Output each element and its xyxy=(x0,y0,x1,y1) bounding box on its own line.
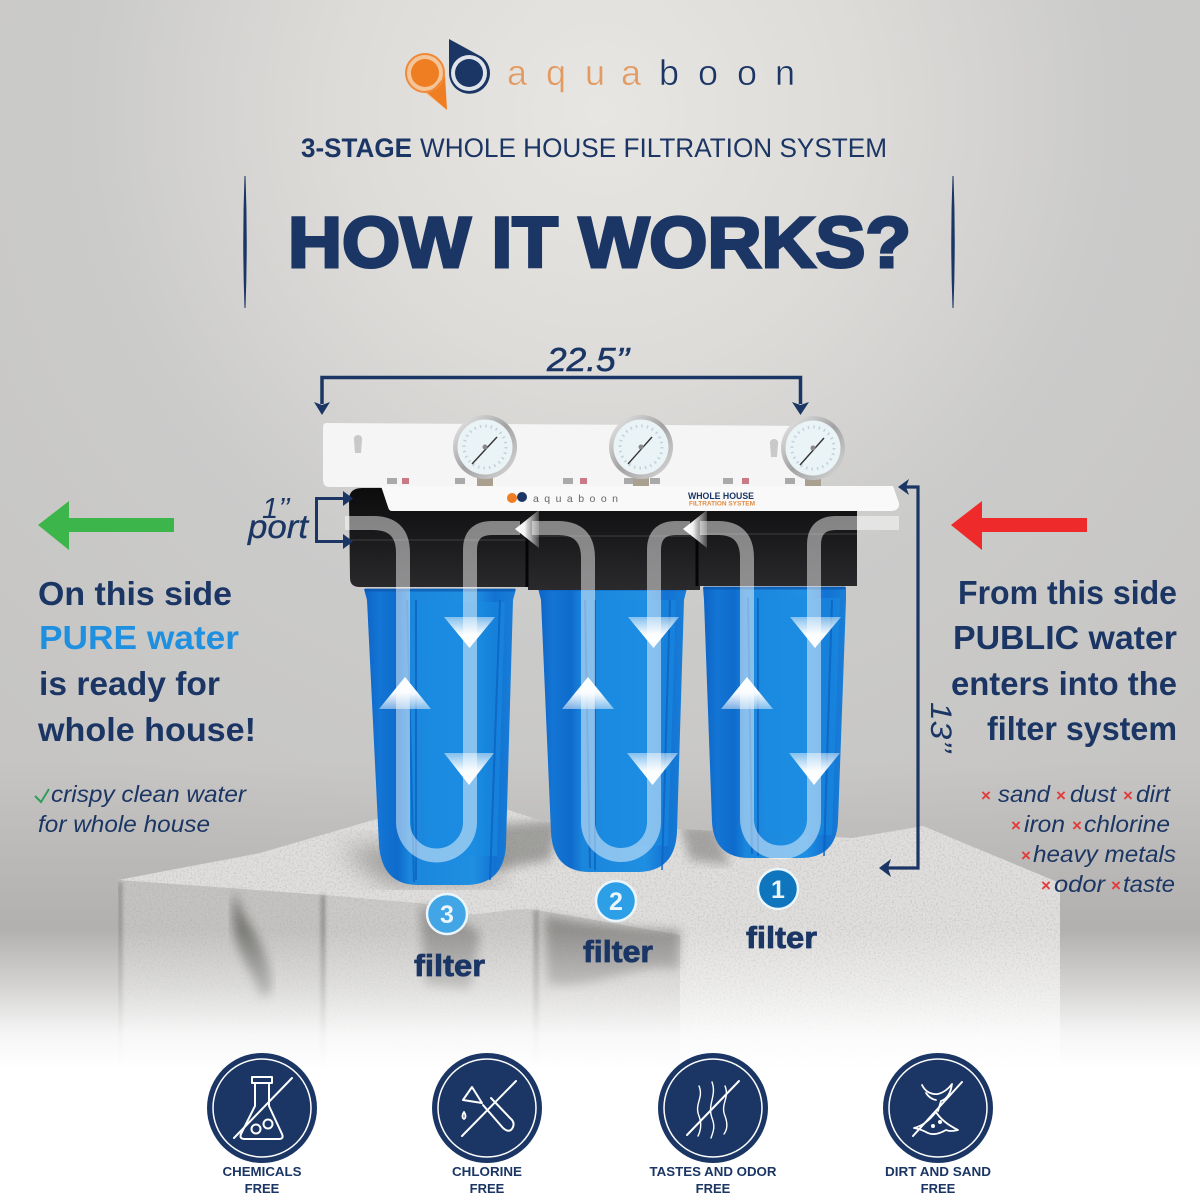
icon: flask xyxy=(207,1053,317,1163)
left text: pure water: PURE water xyxy=(39,619,239,656)
right contaminants list: × xyxy=(1123,786,1133,805)
dimension: port 1 in: 1’’ xyxy=(262,493,291,525)
dimension: height 13 in: 13’’ xyxy=(924,702,957,754)
left text: pure water: is ready for xyxy=(39,665,220,702)
badge: tastes and odor free: TASTES AND ODOR xyxy=(650,1164,777,1179)
filter label 1 xyxy=(746,869,817,955)
right contaminants list: dirt xyxy=(1136,781,1172,807)
black filter heads xyxy=(349,488,857,590)
filter label 1: 1 xyxy=(771,876,785,904)
water flow path stage 3 xyxy=(345,523,520,856)
plate label: FILTRATION SYSTEM xyxy=(689,500,755,508)
heading: HOW IT WORKS? xyxy=(288,204,911,283)
plate label: WHOLE HOUSE xyxy=(688,491,754,501)
green outlet arrow xyxy=(38,501,174,550)
left benefits list xyxy=(35,781,247,837)
dimension: port 1 in xyxy=(247,491,353,549)
badge: tastes and odor free xyxy=(650,1053,777,1196)
red inlet arrow xyxy=(951,501,1087,550)
left text: pure water: On this side xyxy=(38,575,232,612)
right contaminants list: × xyxy=(981,786,991,805)
left benefits list: for whole house xyxy=(38,811,210,837)
right contaminants list: sand xyxy=(998,781,1051,807)
right contaminants list: × xyxy=(1072,816,1082,835)
badge: dirt and sand free: DIRT AND SAND xyxy=(885,1164,991,1179)
right contaminants list: odor xyxy=(1054,871,1106,897)
concrete block xyxy=(118,810,1060,1027)
right text: public water: filter system xyxy=(987,710,1177,747)
dimension: height 13 in xyxy=(879,479,957,877)
left benefits list: crispy clean water xyxy=(51,781,247,807)
logo wordmark: aqua xyxy=(507,52,642,93)
right contaminants list: dust xyxy=(1070,781,1118,807)
left text: pure water xyxy=(37,575,256,748)
badge: chemicals free: CHEMICALS xyxy=(222,1164,302,1179)
right contaminants list: chlorine xyxy=(1084,811,1170,837)
right contaminants list: × xyxy=(1056,786,1066,805)
heading right tick xyxy=(952,176,954,308)
plate logo: aquaboon xyxy=(533,493,618,505)
dimension: width 22.5 in xyxy=(314,341,809,415)
logo xyxy=(405,39,795,110)
badge: dirt and sand free: FREE xyxy=(921,1181,956,1196)
filter bowl 2 xyxy=(538,588,687,872)
filter label 2: filter xyxy=(583,934,653,969)
logo: boon xyxy=(659,52,795,93)
badge: chlorine free: FREE xyxy=(470,1181,505,1196)
badge: chemicals free xyxy=(207,1053,317,1196)
plate label xyxy=(688,491,755,508)
fade to white at bottom xyxy=(0,930,1200,1200)
green check xyxy=(35,789,49,802)
front plate xyxy=(381,486,899,511)
right text: public water: From this side xyxy=(958,574,1177,611)
right contaminants list: heavy metals xyxy=(1033,841,1177,867)
filter bowl 1 xyxy=(703,587,846,858)
dimension: width 22.5 in: 22.5’’ xyxy=(546,341,631,378)
water flow path stage 1 xyxy=(700,523,899,852)
right text: public water xyxy=(951,574,1177,747)
filter label 3 xyxy=(414,894,485,983)
right contaminants list: iron xyxy=(1024,811,1065,837)
gauge 2 xyxy=(609,415,673,486)
right contaminants list: × xyxy=(1111,876,1121,895)
badge: chlorine free: CHLORINE xyxy=(452,1164,522,1179)
water flow path stage 2 xyxy=(532,528,690,855)
wall bracket xyxy=(323,423,815,487)
dimension: port 1 in: port xyxy=(247,508,310,545)
logo mark: navy b xyxy=(449,39,490,94)
badge: tastes and odor free: FREE xyxy=(696,1181,731,1196)
right contaminants list: × xyxy=(1011,816,1021,835)
icon: test tube xyxy=(432,1053,542,1163)
icon: sand timer tail xyxy=(883,1053,993,1163)
left text: pure water: whole house! xyxy=(37,711,256,748)
icon: odor waves xyxy=(658,1053,768,1163)
filter label 3: filter xyxy=(414,948,485,983)
filter label 3: 3 xyxy=(440,901,454,929)
gauge 3 xyxy=(781,416,845,486)
subtitle: 3-STAGE xyxy=(301,133,412,163)
filter label 2 xyxy=(583,881,653,969)
filter label 2: 2 xyxy=(609,888,623,916)
right contaminants list: taste xyxy=(1123,871,1175,897)
badge: dirt and sand free xyxy=(883,1053,993,1196)
gauge 1 xyxy=(453,415,517,486)
flow arrows xyxy=(379,510,841,785)
filter system xyxy=(323,415,899,885)
badge: chlorine free xyxy=(432,1053,542,1196)
right contaminants list: × xyxy=(1021,846,1031,865)
logo mark: orange a xyxy=(405,53,447,110)
right contaminants list xyxy=(981,781,1177,897)
heading left tick xyxy=(244,176,246,308)
filter label 1: filter xyxy=(746,920,817,955)
right contaminants list: × xyxy=(1041,876,1051,895)
right text: public water: PUBLIC water xyxy=(953,619,1177,656)
badge: chemicals free: FREE xyxy=(245,1181,280,1196)
subtitle: WHOLE HOUSE FILTRATION SYSTEM xyxy=(420,133,887,163)
right text: public water: enters into the xyxy=(951,665,1177,702)
filter bowl 3 xyxy=(364,589,516,885)
